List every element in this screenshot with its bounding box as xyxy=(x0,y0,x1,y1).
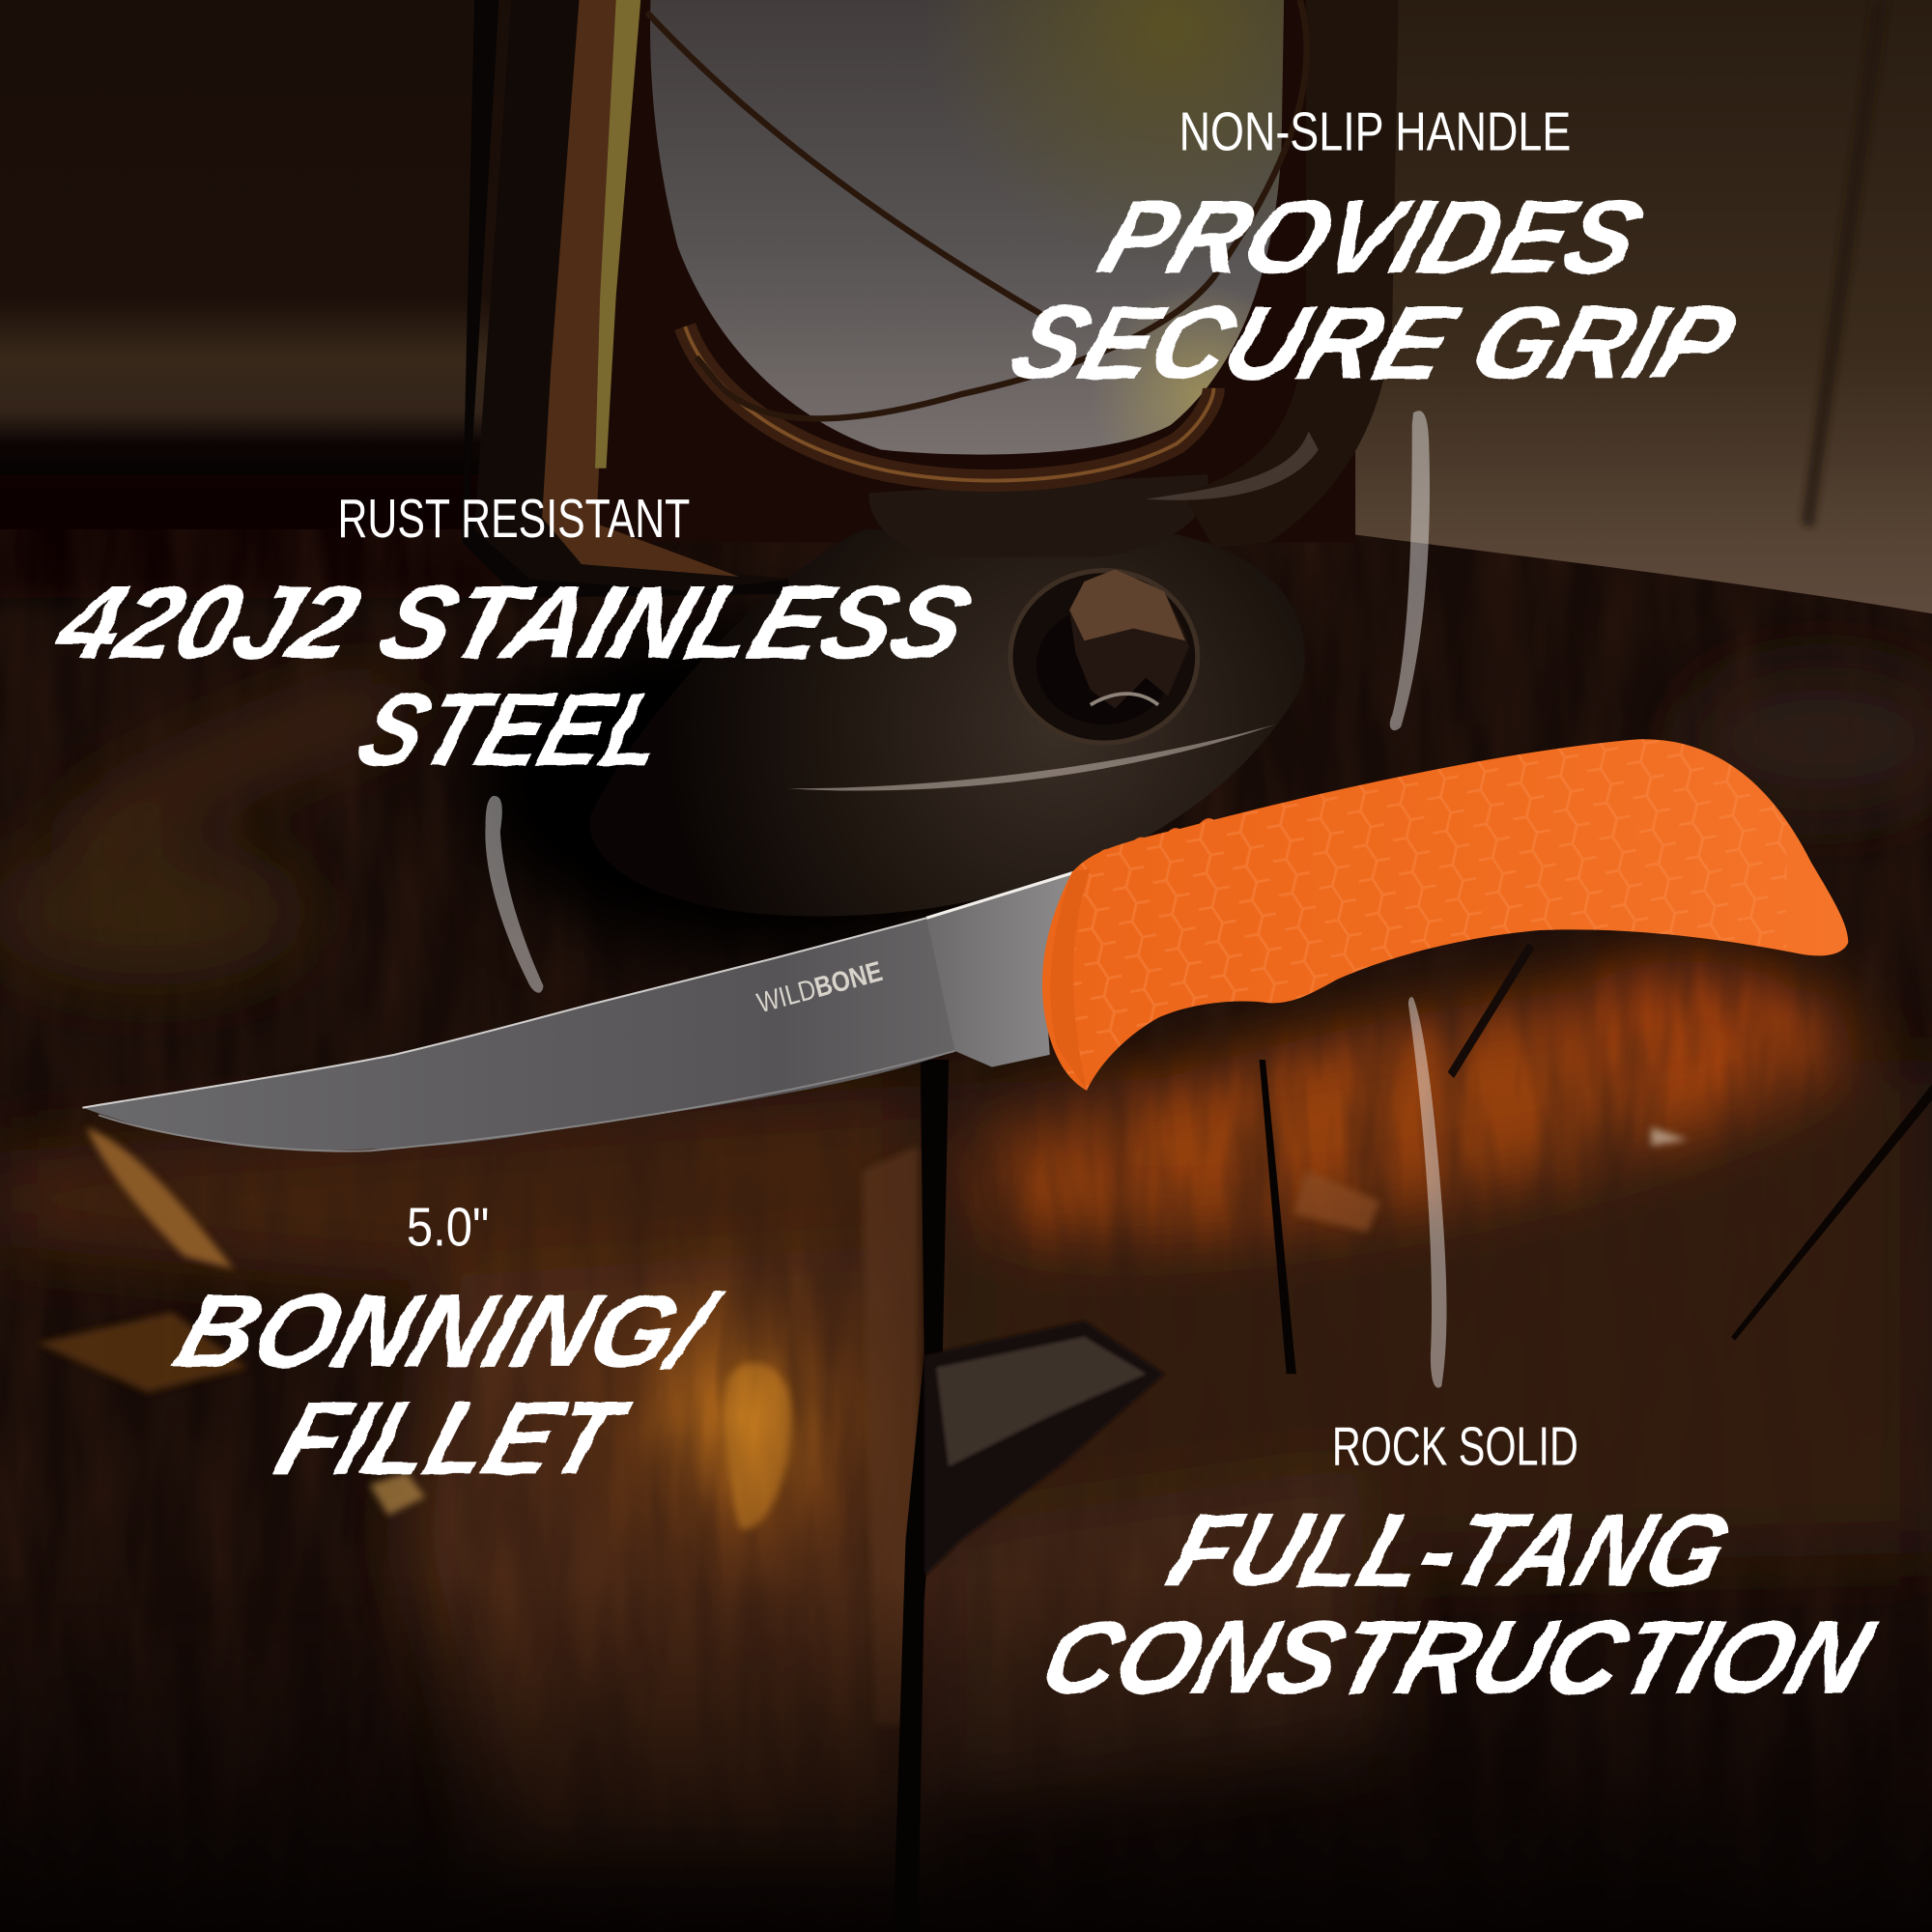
plank highlights xyxy=(37,1127,1688,1725)
lantern xyxy=(462,0,1399,961)
heading: SECURE GRIP xyxy=(998,285,1748,401)
heading: FULL-TANG xyxy=(1155,1492,1745,1608)
lantern base xyxy=(590,529,1305,917)
callout: non-slip handle xyxy=(998,101,1748,401)
heading: STEEL xyxy=(345,672,682,787)
subheading: 5.0" xyxy=(407,1197,489,1258)
subheading: NON-SLIP HANDLE xyxy=(1179,101,1571,162)
callout line: full tang xyxy=(1408,997,1447,1388)
heading: CONSTRUCTION xyxy=(1028,1600,1887,1716)
heading: PROVIDES xyxy=(1087,179,1656,295)
knife blade xyxy=(82,918,955,1151)
callout: rock solid xyxy=(1028,1416,1887,1716)
knot xyxy=(924,1321,1164,1577)
knife ricasso xyxy=(926,872,1074,1067)
plank gaps xyxy=(894,1060,949,1932)
heading: 420J2 STAINLESS xyxy=(43,565,984,681)
blade logo: WILDBONE xyxy=(753,955,886,1019)
right frame xyxy=(1182,0,1399,549)
heading xyxy=(162,1273,732,1496)
heading xyxy=(998,179,1748,401)
heading: BONNING/ xyxy=(162,1273,732,1389)
wood colour blotches xyxy=(0,666,1932,1873)
cloth backdrop xyxy=(1306,0,1932,613)
left frame xyxy=(462,0,788,598)
callout: rust resistant xyxy=(43,488,984,787)
heading: FILLET xyxy=(264,1380,641,1496)
subheading: RUST RESISTANT xyxy=(337,488,690,549)
wooden table xyxy=(0,474,1932,1932)
lantern inner shadow xyxy=(591,0,1355,542)
knife handle xyxy=(1042,733,1848,1091)
callout line: handle grip xyxy=(1390,411,1430,730)
lantern knob xyxy=(1010,569,1198,743)
glass globe xyxy=(650,0,1284,455)
lantern shadow xyxy=(469,616,1060,961)
callout: blade length xyxy=(162,1197,732,1496)
globe rim wires xyxy=(685,327,1213,481)
subheading: ROCK SOLID xyxy=(1332,1416,1578,1477)
knife xyxy=(82,733,1848,1151)
callout line: blade steel xyxy=(485,796,543,993)
heading xyxy=(43,565,984,787)
wall to table shadow xyxy=(0,474,542,598)
lantern collar xyxy=(868,474,1208,557)
heading xyxy=(1028,1492,1887,1716)
